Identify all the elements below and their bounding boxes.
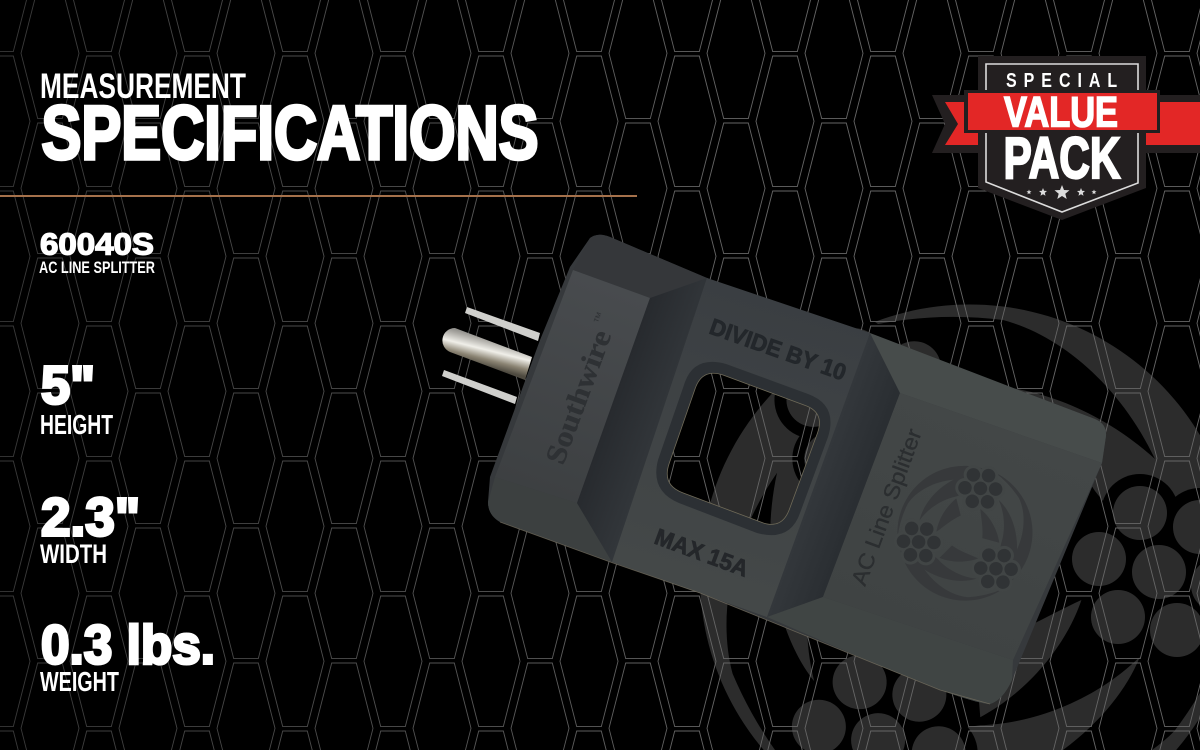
body top bevel left xyxy=(573,235,707,298)
embossed brand: Southwire: Southwire xyxy=(540,326,618,468)
ribbon tail right, red xyxy=(1141,102,1200,145)
embossed text: AC line splitter: AC Line Splitter xyxy=(846,425,927,589)
divider rule xyxy=(0,195,637,197)
icon: ground pin xyxy=(442,328,532,380)
heading: measurement: MEASUREMENT xyxy=(40,67,246,106)
embossed trademark: ™ xyxy=(591,310,608,326)
product name: AC LINE SPLITTER xyxy=(39,259,155,277)
left valley xyxy=(577,278,707,562)
product: AC line splitter xyxy=(442,235,1106,704)
ribbon tail left, dark outline xyxy=(932,95,983,153)
window rim xyxy=(656,362,830,535)
badge text: value: VALUE xyxy=(1004,88,1118,136)
shield inner outline xyxy=(986,64,1138,212)
badge: special value pack xyxy=(932,56,1200,220)
window edge xyxy=(667,373,819,524)
embossed logo xyxy=(836,415,1068,647)
spec label: width: WIDTH xyxy=(40,539,107,569)
spec label: weight: WEIGHT xyxy=(40,666,119,697)
left end panel xyxy=(495,270,650,503)
badge text: pack: PACK xyxy=(1004,126,1121,191)
spec value: width: 2.3" xyxy=(41,488,140,548)
model number: 60040S xyxy=(40,226,154,262)
embossed text: divide by 10: DIVIDE BY 10 xyxy=(706,313,850,385)
product body xyxy=(488,235,1106,704)
shield xyxy=(978,56,1146,220)
icon: top blade prong xyxy=(465,307,540,341)
central face xyxy=(612,278,870,617)
body bottom bevel left xyxy=(488,477,612,562)
body bottom bevel right xyxy=(767,597,1013,704)
icon: bottom blade prong xyxy=(442,370,517,404)
body top bevel right xyxy=(870,333,1106,463)
heading: specifications: SPECIFICATIONS xyxy=(42,91,538,176)
spec value: weight: 0.3 lbs. xyxy=(41,614,215,676)
embossed text: max 15A: MAX 15A xyxy=(651,523,752,582)
right end panel xyxy=(823,393,1102,660)
spec value: height: 5" xyxy=(41,356,95,416)
ribbon banner outline xyxy=(964,90,1160,133)
spec label: height: HEIGHT xyxy=(40,409,113,440)
lower edge highlight xyxy=(500,522,990,704)
ribbon tail right, dark outline xyxy=(1140,95,1200,153)
badge text: special: SPECIAL xyxy=(1006,69,1117,91)
ribbon banner red xyxy=(968,93,1157,130)
ribbon tail left, red xyxy=(945,102,983,145)
right valley xyxy=(767,333,900,617)
icon: rating stars xyxy=(1026,185,1096,199)
